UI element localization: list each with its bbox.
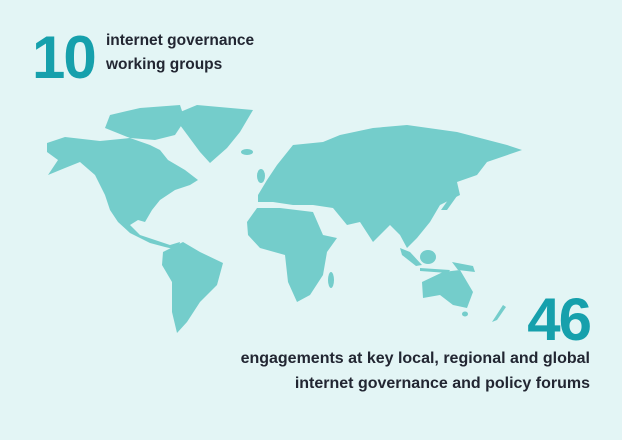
Madagascar [328,272,334,288]
label [106,32,254,73]
number 46: 46 [527,286,590,353]
label: working groups [106,56,222,73]
South America [162,242,223,333]
label: internet governance and policy forums [295,375,590,392]
stat: 10 working groups [32,24,254,91]
label: internet governance [106,32,254,49]
North America [47,137,198,250]
Australia [422,270,473,308]
UK and Iceland [257,169,265,183]
Arctic islands [105,105,185,140]
stat: 46 engagements [241,286,590,392]
label [241,350,590,392]
number 10: 10 [32,24,95,91]
Japan [441,193,457,210]
Eurasia [258,125,522,248]
Africa [247,208,337,302]
New Zealand [492,305,506,322]
Indonesia [400,248,422,266]
Greenland [173,105,253,163]
label: engagements at key local, regional and global [241,350,590,367]
